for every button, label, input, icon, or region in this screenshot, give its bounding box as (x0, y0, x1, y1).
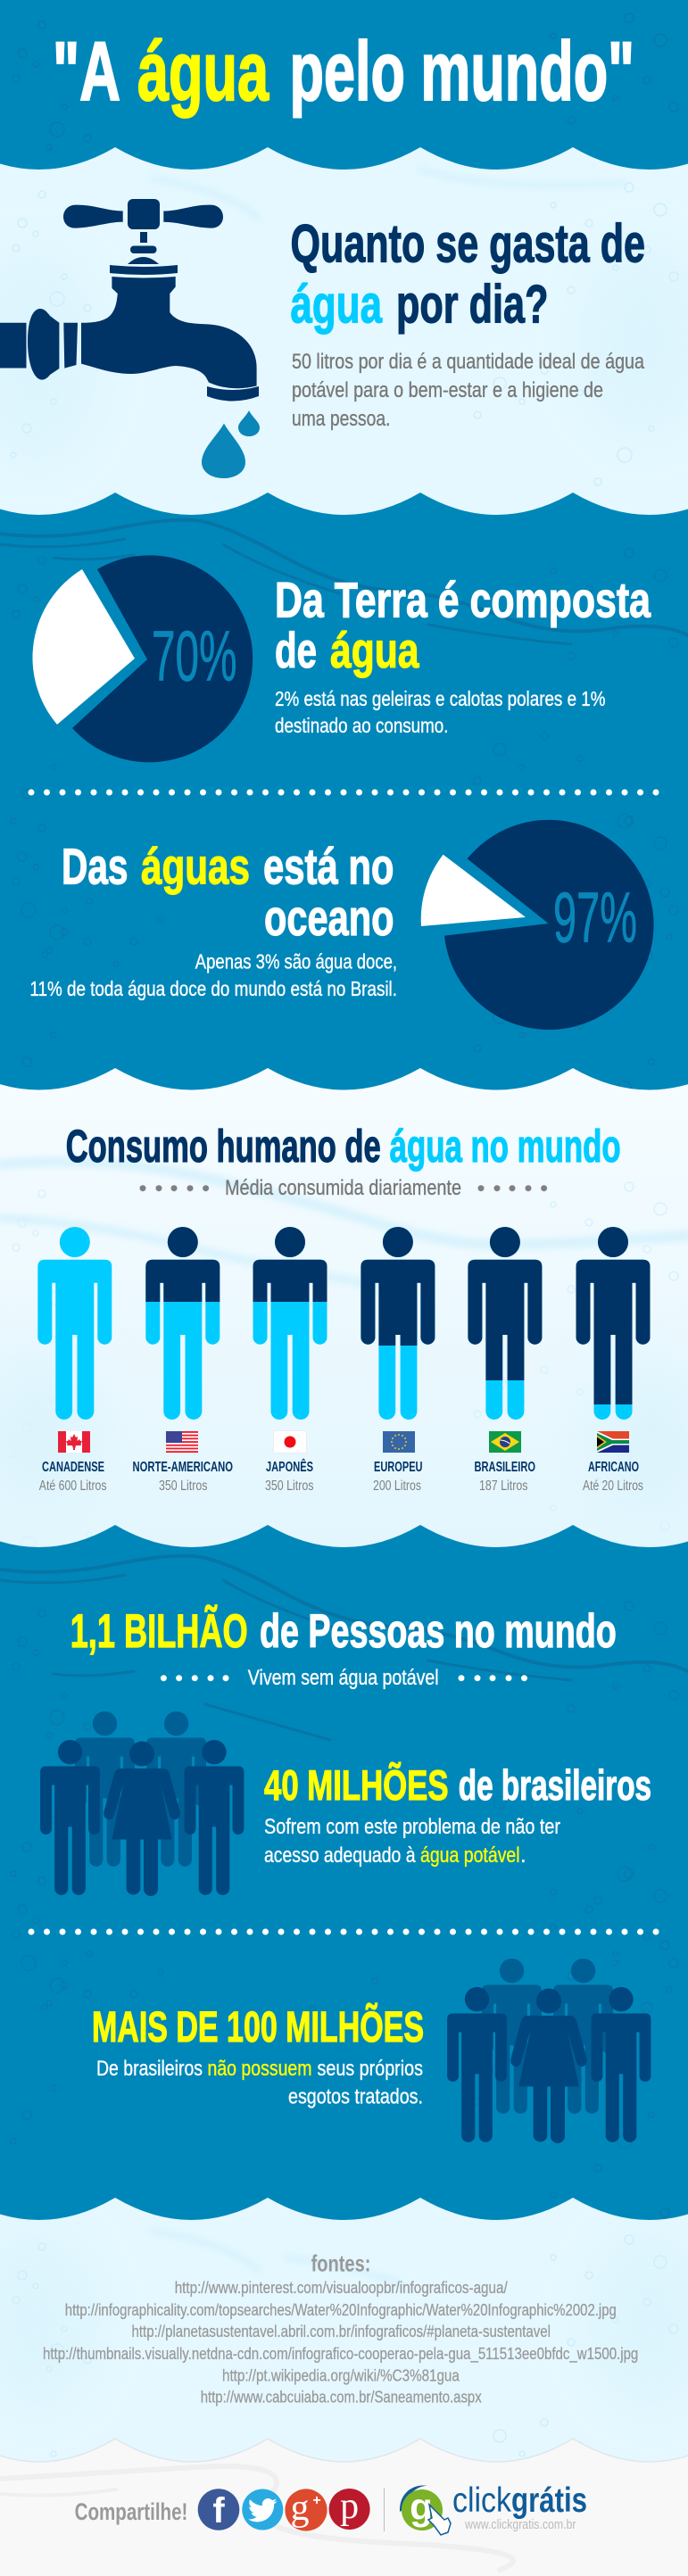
text block: esgotos (96, 2057, 423, 2109)
labels: litros: 350 Litros (159, 1479, 208, 1494)
icon: pinterest (329, 2486, 370, 2530)
heading: das aguas (62, 839, 394, 947)
labels: nationality (42, 1459, 639, 1475)
text block: source links: http://planetasustentavel.abril.com.br/infograficos/#planeta-sustentavel (132, 2323, 551, 2340)
logo: clickgratis: grátis (511, 2481, 587, 2520)
text block: geleiras: destinado ao consumo. (275, 714, 448, 737)
heading: 40 milhoes (264, 1761, 651, 1809)
chart: people consumption (37, 1227, 651, 1420)
labels: litros (39, 1479, 643, 1494)
icon: google plus (285, 2488, 327, 2531)
subtitle: vivem sem agua: Vivem sem água potável (248, 1666, 439, 1690)
text block: 50 litros: uma pessoa. (292, 407, 391, 431)
text block: source links (43, 2279, 638, 2406)
heading: fontes: fontes: (311, 2250, 370, 2277)
heading: 1,1 bilhao (70, 1604, 617, 1658)
labels: litros: 350 Litros (265, 1479, 314, 1494)
panel: top blue header (0, 0, 688, 170)
text block: sofrem: Sofrem com este problema de não ter (264, 1815, 560, 1839)
labels: nationality: CANADENSE (42, 1460, 104, 1475)
text block: sofrem: acesso adequado à (264, 1843, 416, 1868)
text block: esgotos: esgotos tratados. (288, 2084, 423, 2109)
labels: litros: Até 20 Litros (583, 1479, 643, 1494)
text block: 50 litros: potável para o bem-estar e a higiene de (292, 378, 603, 402)
icon: water drops (202, 410, 260, 478)
title: "A (53, 24, 120, 118)
labels: nationality: EUROPEU (374, 1460, 423, 1475)
icon: facebook: f (212, 2491, 225, 2530)
heading: da terra (275, 571, 651, 678)
person: norte-americano (145, 1227, 220, 1420)
logo: clickgratis (400, 2481, 587, 2535)
heading: 40 milhoes: 40 MILHÕES (264, 1761, 448, 1809)
labels: nationality: NORTE-AMERICANO (132, 1460, 233, 1475)
text block: agua doce (29, 949, 397, 1000)
text block: source links: http://www.cabcuiaba.com.br/Saneamento.aspx (201, 2388, 482, 2406)
heading: das aguas: Das (62, 839, 128, 896)
icon: google plus: g (291, 2488, 309, 2529)
panel: middle blue section (0, 493, 688, 1090)
text block: sofrem: . (520, 1843, 526, 1868)
text: compartilhe: Compartilhe! (75, 2498, 187, 2525)
heading: das aguas: oceano (264, 890, 394, 947)
icon: twitter (242, 2489, 283, 2530)
heading: mais de 100 milhoes: MAIS DE 100 MILHÕES (92, 2002, 424, 2051)
icon: flag brazil (489, 1431, 521, 1453)
chart: pie 70% (32, 555, 253, 762)
heading: quanto se gasta: água (291, 275, 382, 334)
text block: esgotos: De brasileiros (96, 2057, 203, 2081)
icon: pinterest: p (340, 2486, 359, 2527)
labels: litros: 187 Litros (479, 1479, 528, 1494)
subtitle: media consumida: Média consumida diariamente (225, 1176, 461, 1200)
heading: quanto se gasta: por dia? (396, 275, 548, 334)
title: água (137, 24, 269, 118)
panel: footer (0, 2439, 688, 2576)
text block: sofrem: água potável (420, 1843, 520, 1868)
text block: source links: http://www.pinterest.com/visualoopbr/infograficos-agua/ (175, 2279, 508, 2297)
labels: litros: 200 Litros (373, 1479, 421, 1494)
heading: 1,1 bilhao: 1,1 BILHÃO (70, 1604, 248, 1658)
logo: clickgratis: click (452, 2481, 511, 2520)
labels: litros: Até 600 Litros (39, 1479, 107, 1494)
title (53, 24, 634, 118)
chart: pie 70%: 70% (152, 616, 237, 696)
text block: esgotos: não possuem (207, 2057, 312, 2081)
heading: das aguas: está no (263, 839, 394, 896)
person: brasileiro (468, 1227, 542, 1420)
heading: da terra: água (330, 622, 419, 678)
icon: flag canada (58, 1431, 90, 1453)
icon: faucet (0, 199, 259, 402)
icon: flag europe (383, 1431, 415, 1453)
person: canadense (37, 1227, 112, 1420)
text block: 50 litros (292, 350, 645, 431)
labels: nationality: AFRICANO (588, 1460, 639, 1475)
text block: agua doce: Apenas 3% são água doce, (195, 949, 397, 973)
text block: esgotos: seus próprios (318, 2057, 423, 2081)
icon: google plus: + (312, 2493, 321, 2508)
person: europeu (361, 1227, 435, 1420)
person: japones (253, 1227, 327, 1420)
text block: geleiras (275, 687, 606, 737)
icon: flag south africa (597, 1431, 629, 1453)
labels: nationality: JAPONÊS (266, 1459, 313, 1475)
icon: flag usa (166, 1431, 198, 1453)
icon: crowd 2 (447, 1959, 651, 2143)
text block: agua doce: 11% de toda água doce do mundo está no Brasil. (29, 977, 397, 1000)
heading: quanto se gasta (291, 214, 645, 334)
heading: das aguas: águas (141, 839, 250, 896)
text block: source links: http://pt.wikipedia.org/wiki/%C3%81gua (222, 2366, 460, 2384)
icon: flag japan (273, 1431, 307, 1453)
logo: clickgratis: www.clickgratis.com.br (464, 2517, 576, 2532)
logo: clickgratis: g (410, 2486, 433, 2528)
chart: pie 97% (421, 820, 654, 1030)
heading: da terra: de (275, 622, 317, 678)
labels: nationality: BRASILEIRO (475, 1460, 535, 1475)
person: africano (576, 1227, 650, 1420)
subtitle: vivem sem agua (161, 1666, 527, 1690)
panel: lower blue section (0, 1517, 688, 2287)
icon: crowd 1 (40, 1711, 244, 1896)
icon: facebook (198, 2489, 239, 2530)
text block: sofrem (264, 1815, 560, 1868)
text block: geleiras: 2% está nas geleiras e calotas polares e 1% (275, 687, 606, 710)
heading: consumo humano: Consumo humano de (66, 1121, 381, 1172)
